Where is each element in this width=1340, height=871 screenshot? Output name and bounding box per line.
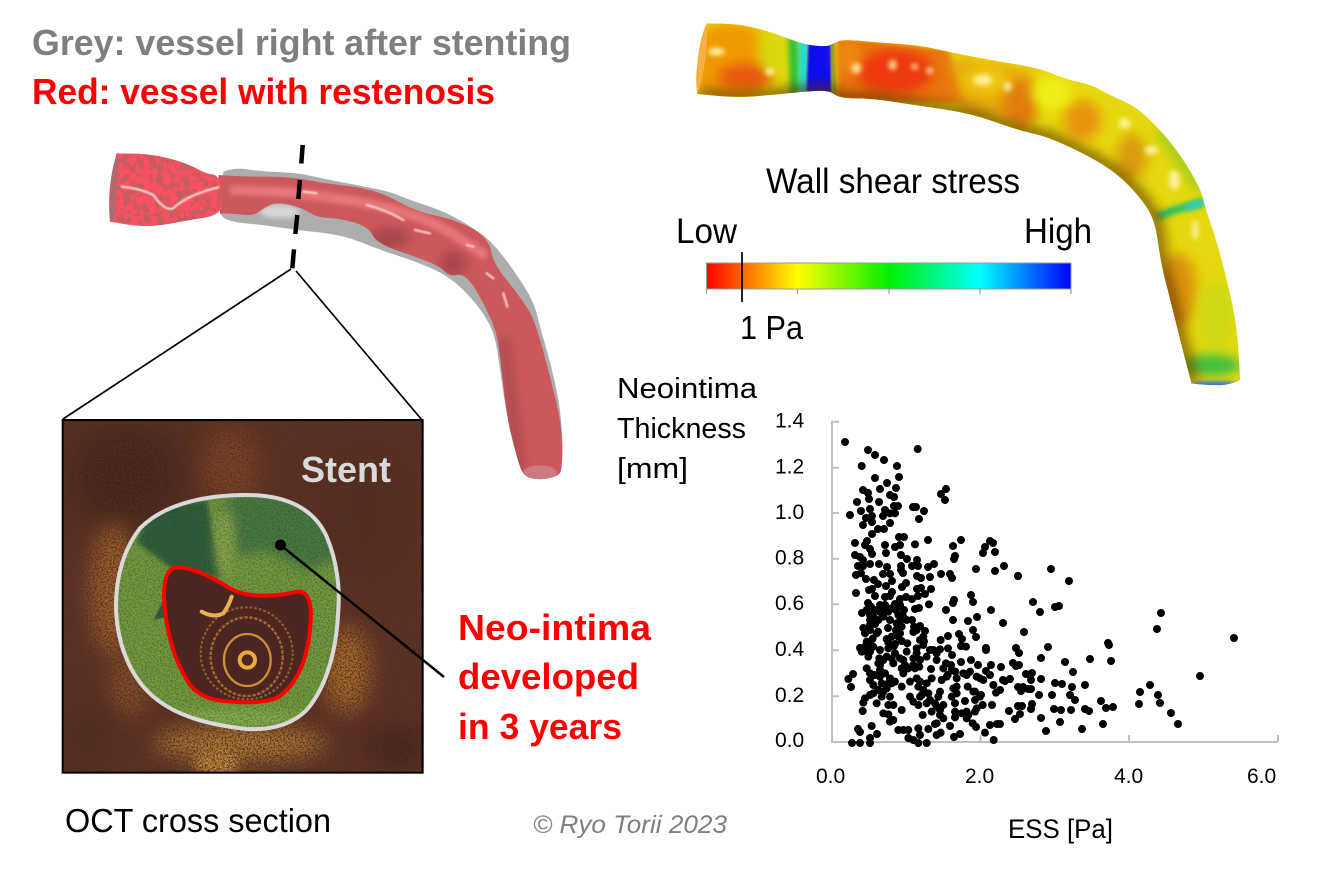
- high label: High: [1024, 212, 1092, 251]
- scale title: Wall shear stress: [766, 162, 1020, 201]
- y axis tick labels: 1.4: [775, 410, 805, 432]
- y axis tick labels: 0.4: [775, 638, 805, 661]
- copyright: © Ryo Torii 2023: [533, 811, 727, 839]
- data points, left part: [845, 442, 1018, 743]
- x axis title: ESS [Pa]: [1008, 814, 1113, 844]
- wall shear stress colour scale: [676, 162, 1092, 346]
- x axis tick labels: 4.0: [1114, 765, 1143, 788]
- vessel coloured by wall shear stress: [696, 23, 1240, 386]
- callout: neo-intima developed in 3 years: developed: [458, 656, 639, 697]
- y axis tick labels: 1.0: [775, 501, 804, 524]
- vessel overlay: stented and restenosed model: [109, 153, 563, 480]
- title: red vessel legend: Red: vessel with restenosis: [32, 71, 495, 112]
- axes: [832, 422, 1278, 742]
- OCT frame: [63, 420, 423, 773]
- y axis title: Thickness: [617, 413, 746, 445]
- callout: neo-intima developed in 3 years: in 3 years: [458, 706, 622, 747]
- grey vessel right after stenting: [220, 169, 563, 479]
- y axis title: Neointima: [617, 373, 758, 405]
- caption: OCT cross section: OCT cross section: [65, 802, 331, 839]
- 1 Pa label: 1 Pa: [740, 309, 804, 346]
- x axis tick labels: 6.0: [1247, 765, 1276, 788]
- OCT tissue background: [60, 420, 430, 777]
- red vessel with restenosis: [218, 175, 562, 480]
- 1 Pa marker: [741, 252, 743, 302]
- data points, right part: [1000, 566, 1234, 731]
- x axis tick labels: 0.0: [816, 765, 845, 788]
- panel: OCT cross section: [60, 420, 430, 777]
- colour bar: [706, 263, 1071, 294]
- y axis tick labels: 0.2: [775, 684, 804, 707]
- y axis tick labels: [775, 410, 805, 752]
- y axis tick labels: 0.0: [775, 729, 804, 752]
- low label: Low: [676, 212, 738, 251]
- x axis tick labels: 2.0: [965, 765, 994, 788]
- y axis title: [mm]: [617, 453, 688, 485]
- callout: neo-intima developed in 3 years: Neo-intima: [458, 607, 652, 648]
- scatter chart: neointima thickness vs ESS: [617, 373, 1278, 844]
- vessel inlet opening: [697, 23, 707, 94]
- dashed section cut line: [292, 145, 303, 268]
- y axis tick labels: 0.6: [775, 592, 804, 615]
- neo-intima tissue, green overlay: [118, 497, 337, 728]
- y axis title: [617, 373, 758, 485]
- pointer from neo-intima to callout: [275, 540, 444, 677]
- stent label: Stent: [301, 449, 391, 490]
- callout: neo-intima developed in 3 years: [458, 607, 652, 747]
- y axis tick labels: 1.2: [775, 456, 804, 478]
- zoom lines from section cut to OCT: [63, 269, 422, 420]
- lumen with catheter rings: [164, 567, 311, 702]
- x axis tick labels: [816, 765, 1276, 788]
- stent inlet, mottled red over grey: [109, 153, 222, 226]
- title: grey vessel legend: Grey: vessel right after stenting: [32, 22, 571, 63]
- y axis tick labels: 0.8: [775, 546, 804, 570]
- stent outline: [116, 495, 339, 729]
